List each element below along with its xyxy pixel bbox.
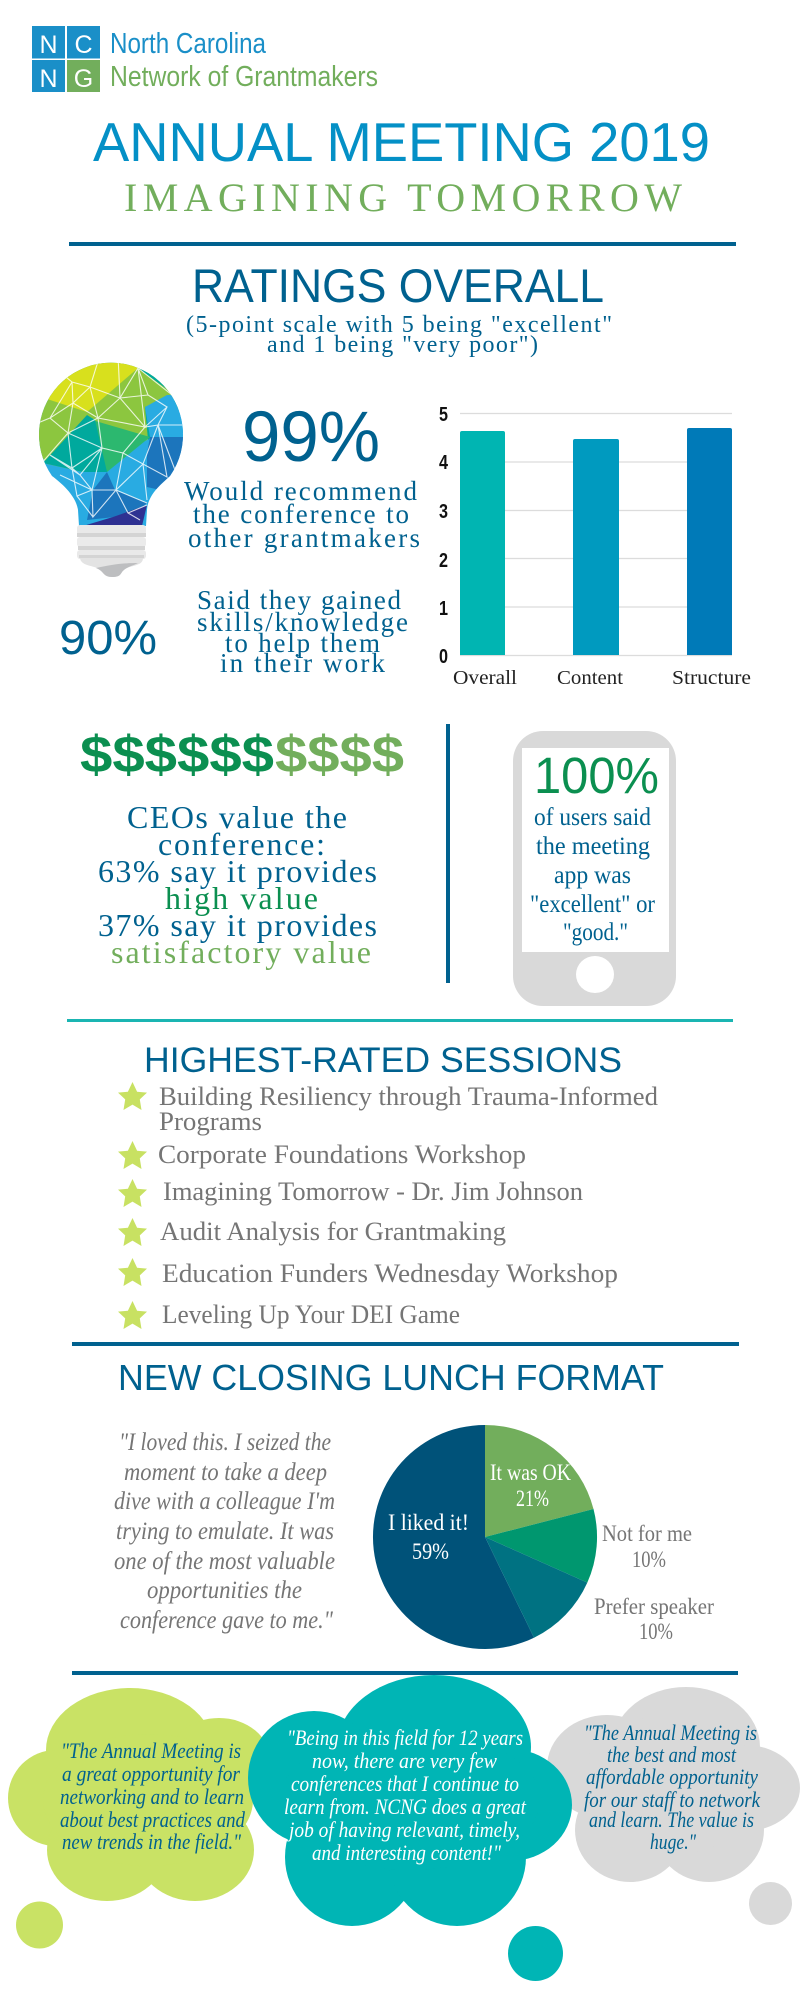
cloud: teal quote: now, there are very few: [312, 1748, 497, 1773]
quote: closing lunch: dive with a colleague I'm: [114, 1488, 335, 1515]
session 4: Audit Analysis for Grantmaking: [160, 1217, 506, 1246]
phone body: [513, 731, 676, 1006]
stat: 99% recommend: 99%: [242, 398, 380, 477]
cloud: teal quote: conferences that I continue to: [291, 1771, 519, 1796]
cloud: gray quote: [547, 1687, 800, 1925]
pie labels: 10%: [632, 1547, 666, 1572]
logo: NCNG: [32, 26, 378, 93]
slice: not for me: [485, 1509, 597, 1583]
quote: closing lunch: one of the most valuable: [114, 1548, 335, 1575]
text: CEOs value: 63% say it provides: [98, 853, 377, 889]
pie labels: 59%: [412, 1539, 449, 1564]
slice: I liked it: [373, 1425, 534, 1649]
session 6: Leveling Up Your DEI Game: [162, 1300, 460, 1329]
y axis labels: 4: [439, 452, 449, 474]
bar: structure: [687, 428, 732, 655]
cloud: green quote: about best practices and: [60, 1807, 246, 1832]
text: CEOs value: 37% say it provides: [98, 907, 377, 943]
stat: 99% recommend: [184, 398, 420, 553]
session 1: Programs: [159, 1107, 262, 1136]
pie labels: [388, 1460, 714, 1644]
session 5: Education Funders Wednesday Workshop: [162, 1259, 618, 1288]
x axis labels: Structure: [672, 667, 751, 689]
stat text: skills and knowledge: to help them: [225, 628, 380, 658]
text: CEOs value: [98, 799, 377, 970]
stat text: skills and knowledge: skills/knowledge: [197, 607, 408, 637]
heading: new closing lunch format: NEW CLOSING LUNCH FORMAT: [118, 1357, 664, 1398]
pie labels: It was OK: [490, 1460, 571, 1485]
text: CEOs value: conference:: [158, 826, 325, 862]
pie labels: Prefer speaker: [594, 1594, 714, 1619]
scale note: and 1 being "very poor"): [267, 332, 538, 358]
cloud: gray quote: affordable opportunity: [586, 1764, 758, 1789]
cloud: teal quote: [248, 1675, 572, 1981]
cloud: gray quote: "The Annual Meeting is: [584, 1720, 757, 1745]
quote: closing lunch: opportunities the: [147, 1577, 302, 1604]
pie labels: 10%: [639, 1619, 673, 1644]
y axis labels: 1: [439, 598, 448, 620]
stat text: skills and knowledge: in their work: [220, 648, 386, 678]
bar: overall: [460, 431, 505, 655]
logo squares: [32, 26, 100, 93]
text: CEOs value: high value: [165, 880, 318, 916]
logo squares: N: [39, 65, 58, 93]
bar chart: ratings: [439, 404, 751, 689]
x axis labels: [453, 667, 751, 689]
slice: prefer speaker: [485, 1537, 587, 1638]
quote: closing lunch: trying to emulate. It was: [116, 1518, 334, 1545]
pie labels: I liked it!: [388, 1510, 469, 1535]
stat: 90% value: 90%: [59, 612, 157, 665]
quote: closing lunch: moment to take a deep: [124, 1459, 327, 1486]
phone screen: [522, 748, 669, 952]
stat text: skills and knowledge: [197, 585, 408, 678]
logo squares: G: [74, 65, 93, 93]
phone caption: "excellent" or: [530, 891, 656, 918]
x axis labels: Content: [557, 667, 623, 689]
logo wordmark: [110, 28, 378, 93]
y axis labels: 0: [439, 646, 448, 668]
cloud: gray quote: the best and most: [607, 1742, 737, 1767]
cloud: green quote: a great opportunity for: [62, 1761, 240, 1786]
icon: dollar signs: $$$$$$: [80, 726, 274, 784]
pie chart: closing lunch: [373, 1425, 714, 1649]
pie labels: 21%: [516, 1486, 549, 1511]
icon: dollar signs: [80, 726, 404, 784]
cloud: gray quote: huge.": [650, 1829, 697, 1854]
logo squares: C: [74, 31, 93, 59]
scale note: (5-point scale with 5 being "excellent": [186, 312, 612, 338]
cloud: teal quote: and interesting content!": [312, 1840, 502, 1865]
cloud: green quote: new trends in the field.": [62, 1829, 242, 1854]
logo wordmark: Network of Grantmakers: [110, 61, 378, 93]
bulb screw base: [77, 525, 146, 577]
cloud: teal quote: learn from. NCNG does a great: [284, 1794, 527, 1819]
quote: closing lunch: [114, 1429, 335, 1634]
cloud: green quote: "The Annual Meeting is: [61, 1738, 241, 1763]
scale note: [186, 312, 612, 358]
title: ANNUAL MEETING 2019: [93, 112, 710, 173]
100% figure: 100%: [534, 747, 659, 804]
phone home button: [576, 956, 614, 993]
logo squares: N: [39, 31, 58, 59]
icon: dollar signs: $$$$: [275, 726, 404, 784]
phone: app rating: [513, 731, 676, 1006]
sessions list: [118, 1082, 658, 1329]
quote: closing lunch: "I loved this. I seized the: [119, 1429, 331, 1456]
heading: highest-rated sessions: HIGHEST-RATED SESSIONS: [144, 1041, 622, 1080]
stat text: skills and knowledge: Said they gained: [197, 585, 402, 615]
subtitle: IMAGINING TOMORROW: [124, 175, 682, 220]
phone caption: the meeting: [536, 833, 650, 860]
phone caption: app was: [554, 862, 631, 889]
y axis labels: [439, 404, 449, 668]
stat: 99% recommend: Would recommend: [184, 476, 418, 506]
x axis labels: Overall: [453, 667, 517, 689]
session 1: Building Resiliency through Trauma-Informed: [159, 1082, 658, 1111]
cloud: green quote: [8, 1688, 270, 1948]
y axis labels: 5: [439, 404, 448, 426]
phone caption: of users said: [534, 804, 651, 831]
y axis labels: 2: [439, 550, 448, 572]
text: CEOs value: satisfactory value: [111, 934, 371, 970]
bar: content: [573, 439, 619, 655]
y axis labels: 3: [439, 501, 448, 523]
slice: it was OK: [485, 1425, 594, 1537]
cloud: green quote: networking and to learn: [60, 1784, 244, 1809]
icon: light bulb: [39, 362, 183, 577]
cloud: gray quote: for our staff to network: [584, 1787, 761, 1812]
bulb glass: [39, 362, 183, 526]
quote: closing lunch: conference gave to me.": [120, 1607, 333, 1634]
stat: 99% recommend: other grantmakers: [188, 523, 420, 553]
cloud: teal quote: "Being in this field for 12 years: [287, 1725, 523, 1750]
phone caption: [530, 804, 656, 946]
text: CEOs value: CEOs value the: [127, 799, 347, 835]
session 3: Imagining Tomorrow - Dr. Jim Johnson: [163, 1177, 583, 1206]
session 2: Corporate Foundations Workshop: [158, 1140, 526, 1169]
heading: ratings overall: RATINGS OVERALL: [192, 259, 604, 312]
cloud: gray quote: and learn. The value is: [589, 1807, 754, 1832]
stat: 99% recommend: the conference to: [193, 499, 409, 529]
session 1: [118, 1082, 658, 1136]
logo wordmark: North Carolina: [110, 28, 267, 60]
phone caption: "good.": [563, 919, 628, 946]
pie labels: Not for me: [602, 1521, 692, 1546]
cloud: teal quote: job of having relevant, timely,: [286, 1817, 520, 1842]
